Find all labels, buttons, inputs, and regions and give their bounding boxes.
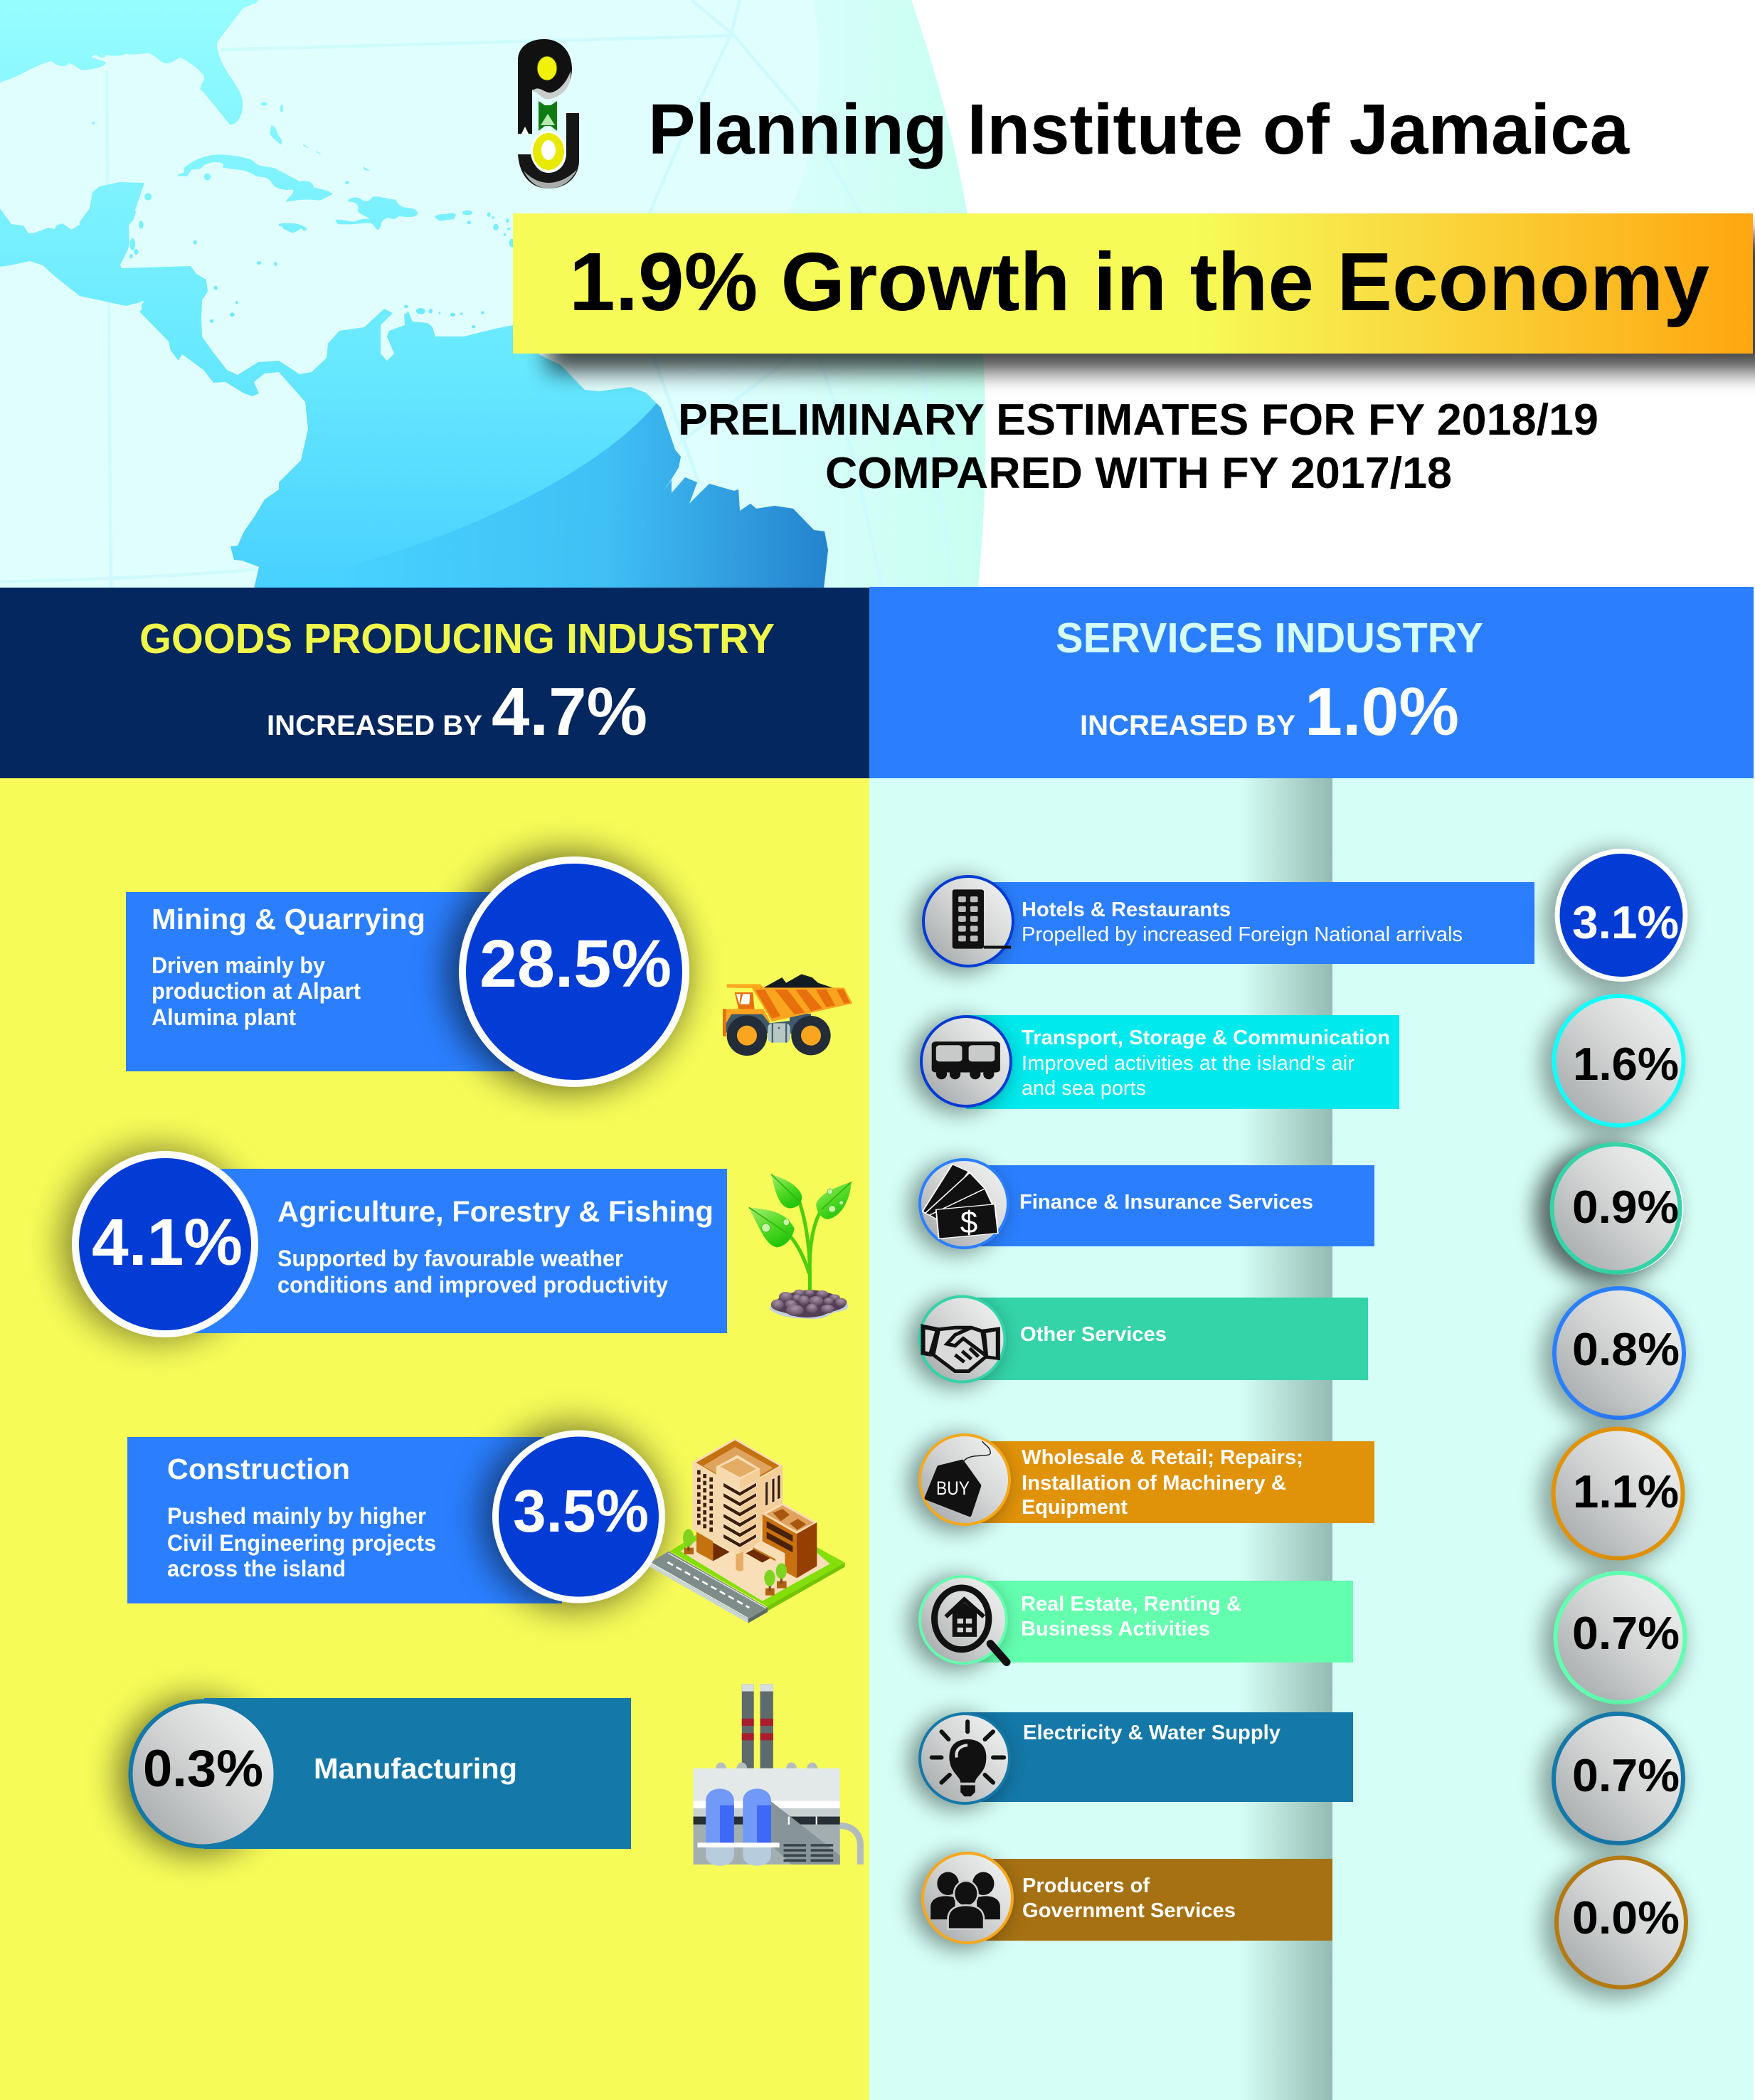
service: wholesale and retail: Equipment	[1022, 1496, 1128, 1519]
icon badge: hotel building	[912, 876, 1013, 973]
map of the Caribbean and Central America	[0, 0, 889, 588]
percentage badge: wholesale 1.1%: 1.1%	[1573, 1465, 1679, 1517]
icon: isometric building	[649, 1438, 845, 1623]
service: real estate, renting and business: Business Activities	[1021, 1618, 1210, 1640]
percentage badge: government 0.0%	[1542, 1857, 1686, 1999]
panel header: goods producing industry: INCREASED BY	[267, 710, 482, 741]
item: agriculture, forestry and fishing: Supported by favourable weather	[277, 1246, 623, 1271]
item: mining and quarrying: 28.5%	[479, 926, 672, 1002]
icon badge: group of people	[911, 1853, 1012, 1950]
item: agriculture, forestry and fishing: 4.1%	[92, 1205, 243, 1279]
service: hotels and restaurants: Propelled by increased Foreign National arrivals	[1022, 923, 1463, 946]
percentage badge: electricity 0.7%	[1539, 1712, 1683, 1855]
logo: PIOJ emblem	[518, 39, 579, 189]
service: finance and insurance	[909, 1160, 1374, 1254]
panel header: goods producing industry	[0, 588, 869, 778]
title: Planning Institute of Jamaica: Planning Institute of Jamaica	[648, 90, 1630, 169]
item: construction: Pushed mainly by higher	[167, 1503, 426, 1529]
service: wholesale and retail: Installation of Machinery &	[1022, 1472, 1286, 1495]
panel header: goods producing industry: GOODS PRODUCING INDUSTRY	[139, 615, 775, 662]
item: mining and quarrying	[126, 852, 688, 1091]
service: electricity and water supply	[908, 1712, 1353, 1810]
item: agriculture, forestry and fishing	[61, 1147, 727, 1341]
percentage badge: construction 3.5%: 3.5%	[513, 1478, 649, 1544]
percentage badge: finance 0.9%: 0.9%	[1572, 1181, 1679, 1233]
percentage badge: government 0.0%: 0.0%	[1572, 1892, 1680, 1943]
icon badge: rail car	[910, 1017, 1011, 1113]
panel: services background	[869, 778, 1754, 2100]
percentage badge: real estate 0.7%	[1542, 1571, 1685, 1714]
item: mining and quarrying: Alumina plant	[152, 1004, 296, 1030]
service: real estate, renting and business	[908, 1576, 1353, 1670]
percentage badge: transport 1.6%: 1.6%	[1573, 1038, 1679, 1090]
service: wholesale and retail	[908, 1435, 1374, 1532]
percentage badge: transport 1.6%	[1540, 995, 1683, 1137]
service: transport, storage and communication	[910, 1015, 1399, 1113]
service: real estate, renting and business: Real Estate, Renting &	[1021, 1593, 1241, 1616]
service: hotels and restaurants	[912, 876, 1534, 973]
item: agriculture, forestry and fishing: Agriculture, Forestry & Fishing	[277, 1195, 714, 1228]
service: finance and insurance: Finance & Insurance Services	[1019, 1191, 1313, 1214]
land: Gulf coast and Florida	[0, 0, 514, 329]
service: wholesale and retail: Wholesale & Retail; Repairs;	[1022, 1446, 1303, 1469]
item: construction: Construction	[167, 1453, 350, 1485]
percentage badge: hotels 3.1%	[1544, 849, 1686, 992]
item: manufacturing: Manufacturing	[314, 1752, 517, 1785]
service: other services	[909, 1296, 1368, 1388]
panel header: goods producing industry: 4.7%	[492, 674, 647, 750]
item: mining and quarrying: Driven mainly by	[152, 953, 325, 978]
item: manufacturing: 0.3%	[143, 1740, 263, 1798]
service: producers of government services: Producers of	[1022, 1874, 1150, 1897]
service: electricity and water supply: Electricity & Water Supply	[1023, 1722, 1281, 1744]
subtitle: PRELIMINARY ESTIMATES FOR FY 2018/19	[678, 396, 1598, 445]
service: transport, storage and communication: Transport, Storage & Communication	[1022, 1027, 1390, 1049]
subtitle: COMPARED WITH FY 2017/18	[825, 449, 1452, 498]
item: agriculture, forestry and fishing: conditions and improved productivity	[277, 1272, 668, 1298]
panel header: services industry: SERVICES INDUSTRY	[1056, 615, 1483, 662]
icon: dump truck	[723, 974, 852, 1056]
service: producers of government services	[911, 1853, 1332, 1950]
service: transport, storage and communication: and sea ports	[1022, 1077, 1146, 1100]
icon badge: light bulb	[908, 1714, 1009, 1810]
percentage badge: finance 0.9%	[1535, 1142, 1683, 1283]
icon: factory	[694, 1684, 860, 1866]
headline banner	[513, 213, 1755, 371]
item: construction: Civil Engineering projects	[167, 1530, 436, 1556]
item: mining and quarrying: production at Alpart	[152, 978, 361, 1004]
percentage badge: real estate 0.7%: 0.7%	[1572, 1607, 1680, 1659]
icon badge: house in magnifier	[908, 1576, 1007, 1670]
icon: seedling	[749, 1174, 852, 1319]
item: construction: across the island	[167, 1556, 346, 1581]
item: mining and quarrying: Mining & Quarrying	[152, 903, 425, 935]
panel header: services industry	[869, 587, 1754, 778]
panel header: services industry: 1.0%	[1305, 674, 1459, 750]
land: Central and South America	[0, 182, 828, 588]
percentage badge: other services 0.8%: 0.8%	[1572, 1323, 1680, 1375]
subtitle	[678, 396, 1598, 498]
icon badge: price tag: BUY	[936, 1478, 970, 1499]
item: construction	[127, 1424, 665, 1609]
headline text: 1.9% Growth in the Economy	[569, 235, 1709, 328]
background: header area	[0, 0, 1755, 590]
icon badge: handshake	[909, 1296, 1004, 1388]
item: manufacturing	[120, 1698, 631, 1853]
service: transport, storage and communication: Improved activities at the island's air	[1022, 1052, 1354, 1075]
panel header: services industry: INCREASED BY	[1080, 710, 1295, 741]
percentage badge: hotels 3.1%: 3.1%	[1572, 896, 1679, 948]
service: hotels and restaurants: Hotels & Restaurants	[1022, 898, 1231, 921]
land: globe-shaded part of South America	[413, 403, 828, 588]
percentage badge: construction 3.5%	[495, 1433, 662, 1600]
percentage badge: electricity 0.7%: 0.7%	[1572, 1749, 1680, 1801]
service: other services: Other Services	[1020, 1323, 1167, 1346]
icon badge: banknotes: $	[960, 1205, 977, 1240]
percentage badge: wholesale 1.1%	[1539, 1427, 1683, 1569]
service: producers of government services: Government Services	[1022, 1899, 1236, 1922]
icon badge: price tag	[908, 1435, 1009, 1532]
panel: goods producing background	[0, 778, 869, 2100]
icon badge: banknotes	[909, 1160, 1008, 1254]
percentage badge: other services 0.8%	[1541, 1287, 1684, 1429]
